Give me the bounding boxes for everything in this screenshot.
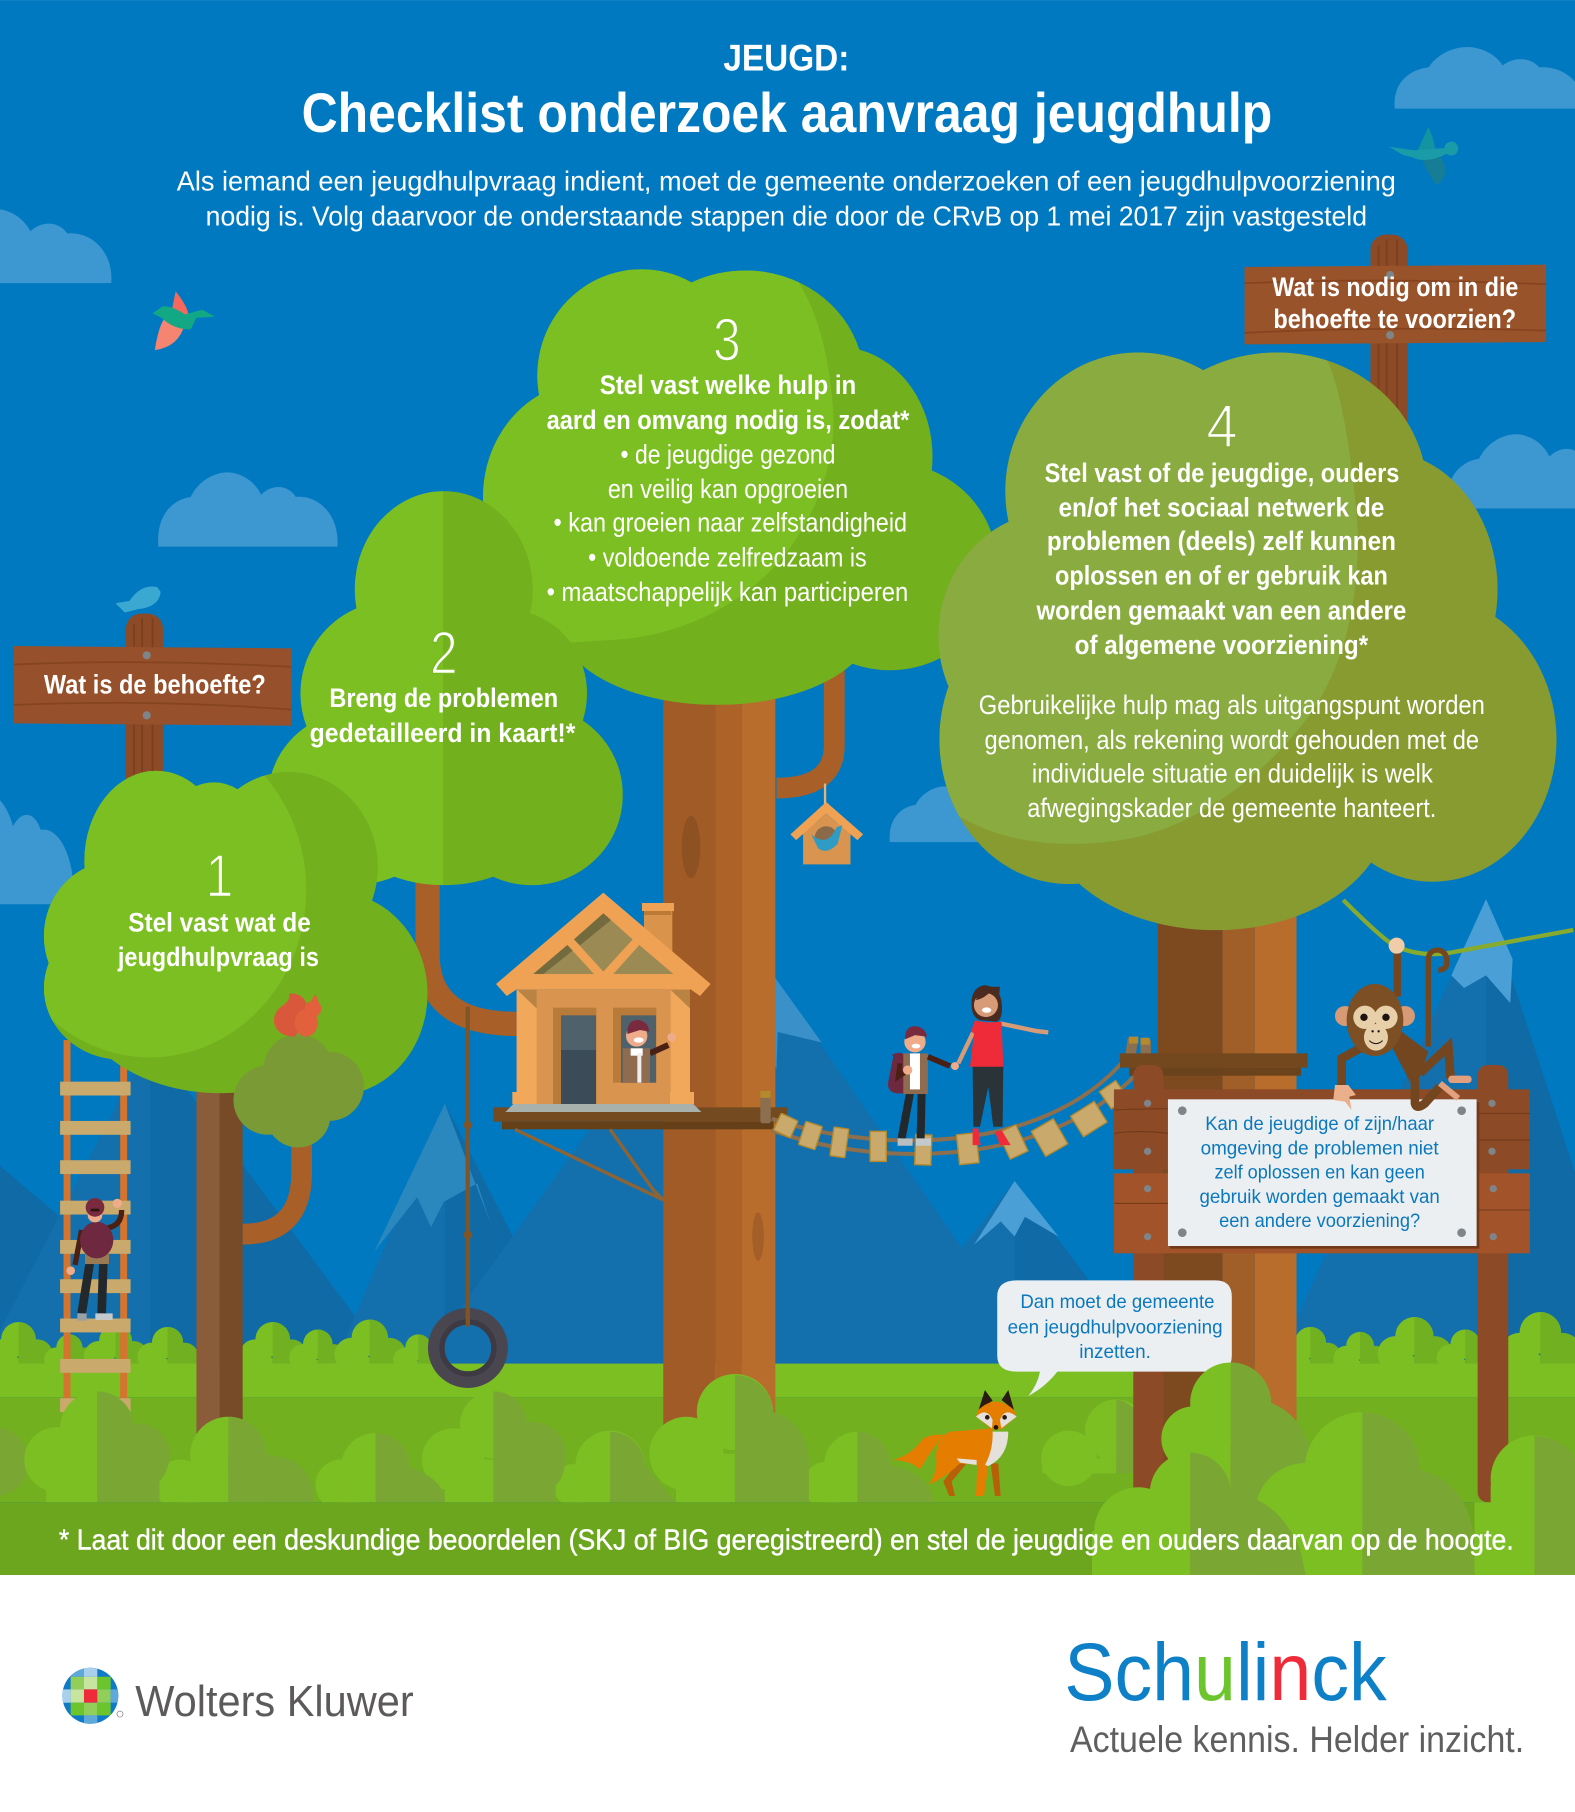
ladder (60, 1040, 131, 1416)
tree 1 crown (44, 770, 428, 1094)
step 2 text (310, 620, 576, 748)
signpost top right: Wat is nodig om in die (1272, 272, 1518, 302)
tire swing (436, 1007, 500, 1380)
step 3 text: • maatschappelijk kan participeren (547, 577, 908, 607)
step 2 text: Breng de problemen (329, 683, 558, 713)
logo: Schulinck: Schulinck (1064, 1627, 1388, 1718)
step 2 text: gedetailleerd in kaart!* (310, 718, 576, 748)
step 3 text: en veilig kan opgroeien (608, 474, 848, 504)
title (302, 38, 1272, 144)
whiteboard question text: Kan de jeugdige of zijn/haar (1205, 1113, 1434, 1135)
platform of tree house (493, 1107, 787, 1200)
speech bubble: een jeugdhulpvoorziening (1008, 1317, 1223, 1339)
step 1 text: jeugdhulpvraag is (117, 942, 319, 972)
step 4 text: Gebruikelijke hulp mag als uitgangspunt worden (979, 690, 1485, 720)
mountains (0, 899, 1575, 1375)
whiteboard question text: gebruik worden gemaakt van (1199, 1186, 1440, 1208)
step 4 text: individuele situatie en duidelijk is welk (1032, 758, 1434, 788)
speech bubble: inzetten. (1079, 1341, 1151, 1363)
step 4 text: genomen, als rekening wordt gehouden met de (985, 725, 1479, 755)
step 1 text (117, 843, 319, 972)
front right bushes (1092, 1362, 1575, 1575)
whiteboard question text (1199, 1113, 1440, 1232)
signpost left (14, 614, 291, 816)
lawn (0, 1364, 1575, 1575)
speech bubble: Dan moet de gemeente (1020, 1291, 1215, 1313)
rope bridge (760, 1037, 1151, 1165)
step 2 text: 2 (430, 620, 458, 687)
logo: Wolters Kluwer (62, 1668, 413, 1724)
tree 2 branch to tree house (428, 872, 517, 1024)
signpost top right (1245, 235, 1546, 466)
back bushes (0, 1312, 1575, 1372)
step 4 text: oplossen en of er gebruik kan (1055, 561, 1388, 591)
tree 3 branch (777, 653, 834, 788)
title: JEUGD: (723, 38, 849, 79)
boy (888, 1026, 959, 1146)
intro text (177, 166, 1396, 231)
step 4 text: afwegingskader de gemeente hanteert. (1027, 793, 1436, 823)
icon: squirrel (274, 994, 321, 1037)
step 3 text: 3 (713, 307, 741, 374)
whiteboard question text: omgeving de problemen niet (1201, 1137, 1439, 1159)
bush behind signboard (1041, 1399, 1147, 1486)
signpost top right: behoefte te voorzien? (1273, 304, 1516, 334)
whiteboard (1168, 1099, 1477, 1246)
clouds (0, 47, 1575, 904)
icon: birdhouse (790, 784, 863, 864)
woman (958, 985, 1048, 1145)
icon: tree house (496, 893, 711, 1112)
intro text: nodig is. Volg daarvoor de onderstaande stappen die door de CRvB op 1 mei 2017 zijn vastgesteld (206, 200, 1367, 231)
step 4 text: worden gemaakt van een andere (1036, 595, 1406, 625)
signboard with posts (1114, 984, 1530, 1502)
step 4 text: 4 (1206, 393, 1238, 460)
whiteboard question text: zelf oplossen en kan geen (1214, 1162, 1425, 1184)
tree 4 trunk (1158, 901, 1297, 1514)
step 3 text: aard en omvang nodig is, zodat* (547, 405, 910, 435)
step 4 text: of algemene voorziening* (1075, 630, 1369, 660)
icon: fox (892, 1390, 1017, 1496)
step 1 text: Stel vast wat de (128, 907, 311, 937)
logo: Wolters Kluwer: Wolters Kluwer (135, 1677, 414, 1726)
tree 2 crown (254, 485, 629, 890)
bird: blue on post (116, 586, 161, 612)
tree 3 crown (483, 269, 992, 705)
step 3 text: • voldoende zelfredzaam is (588, 542, 867, 572)
icon: climbing child on ladder (66, 1198, 122, 1321)
monkey (1333, 984, 1472, 1110)
step 3 text: Stel vast welke hulp in (600, 370, 856, 400)
whiteboard question text: een andere voorziening? (1219, 1210, 1420, 1232)
title: Checklist onderzoek aanvraag jeugdhulp (302, 82, 1272, 144)
foreground bushes (0, 1374, 934, 1510)
icon: boy and woman on bridge (888, 985, 1048, 1146)
step 1 text: 1 (206, 843, 233, 910)
vine and platform (1120, 900, 1573, 1076)
step 3 text: • kan groeien naar zelfstandigheid (554, 508, 907, 538)
tagline: Actuele kennis. Helder inzicht. (1070, 1719, 1524, 1760)
tree 1 trunk and branch (196, 1075, 302, 1444)
step 3 text (547, 307, 910, 607)
step 4 text: Stel vast of de jeugdige, ouders (1045, 458, 1399, 488)
tree 3 trunk (663, 688, 775, 1439)
step 4 text (979, 393, 1485, 823)
tree 4 crown (938, 352, 1556, 930)
step 4 text: en/of het sociaal netwerk de (1058, 493, 1384, 523)
child in window (623, 1020, 676, 1083)
intro text: Als iemand een jeugdhulpvraag indient, moet de gemeente onderzoeken of een jeugdhulpvoorziening (177, 166, 1396, 197)
bird: teal (1389, 127, 1458, 185)
step 4 text: problemen (deels) zelf kunnen (1047, 526, 1396, 556)
small olive bush (233, 1034, 364, 1148)
white footer (0, 1575, 1575, 1812)
speech bubble (997, 1280, 1232, 1396)
signpost left: Wat is de behoefte? (44, 669, 266, 699)
step 3 text: • de jeugdige gezond (621, 439, 835, 469)
bird: coral and green (153, 291, 215, 350)
